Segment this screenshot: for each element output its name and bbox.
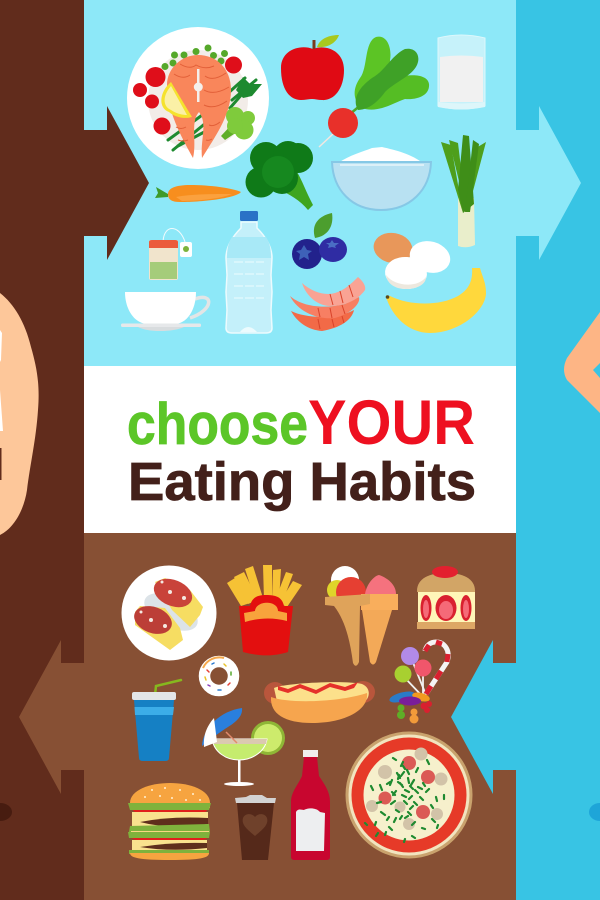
icon: water bottle bbox=[226, 211, 272, 333]
title line: eating habits: Eating Habits bbox=[128, 452, 476, 512]
icon: sandwich plate bbox=[122, 566, 216, 660]
icon: salmon plate bbox=[127, 27, 269, 169]
title word: choose: choose bbox=[127, 392, 308, 457]
arrow: right figure panel into junk food bbox=[451, 640, 516, 794]
icon: ketchup bottle bbox=[291, 750, 330, 860]
icon: tea cup bbox=[121, 292, 209, 331]
panel: healthy food bbox=[84, 0, 516, 366]
icon: bowl of rice bbox=[332, 147, 431, 210]
icon: candy and lollipops bbox=[388, 642, 448, 724]
panel: junk food bbox=[84, 533, 516, 900]
icon: eggs bbox=[371, 230, 454, 291]
icon: pizza bbox=[346, 732, 472, 858]
icon: broccoli bbox=[246, 141, 313, 210]
arrow: junk food toward left figure bbox=[19, 640, 84, 794]
icon: radish with leaves bbox=[319, 37, 429, 147]
right column: slim figure background bbox=[516, 0, 600, 900]
icon: french fries bbox=[227, 565, 302, 655]
panel: title background bbox=[84, 366, 516, 533]
icon: shrimp bbox=[290, 277, 365, 331]
icon: carrot bbox=[155, 185, 241, 202]
icon: strawberry cake bbox=[417, 566, 475, 629]
icon: coffee cup bbox=[235, 795, 276, 860]
icon: cocktail bbox=[202, 708, 285, 786]
icon: donut bbox=[203, 657, 234, 690]
icon: leek bbox=[441, 135, 486, 247]
icon: hot dog bbox=[264, 681, 375, 723]
icon: banana bbox=[386, 268, 486, 333]
figure: overweight body bbox=[0, 293, 39, 821]
title: choose your eating habits bbox=[127, 388, 476, 512]
arrow: healthy food toward right figure bbox=[516, 106, 581, 260]
figure: slim body bbox=[564, 312, 600, 821]
arrow: healthy food into left figure panel bbox=[84, 106, 149, 260]
icon: burger bbox=[128, 783, 211, 860]
title word: your: YOUR bbox=[308, 388, 475, 458]
icon: ice cream cones bbox=[325, 566, 398, 666]
icon: glass of milk bbox=[438, 35, 485, 110]
left column: overweight figure background bbox=[0, 0, 84, 900]
icon: soda cup bbox=[132, 680, 181, 761]
icon: apple bbox=[281, 35, 344, 100]
icon: tea bag bbox=[149, 229, 192, 280]
icon: blueberries bbox=[292, 213, 347, 269]
